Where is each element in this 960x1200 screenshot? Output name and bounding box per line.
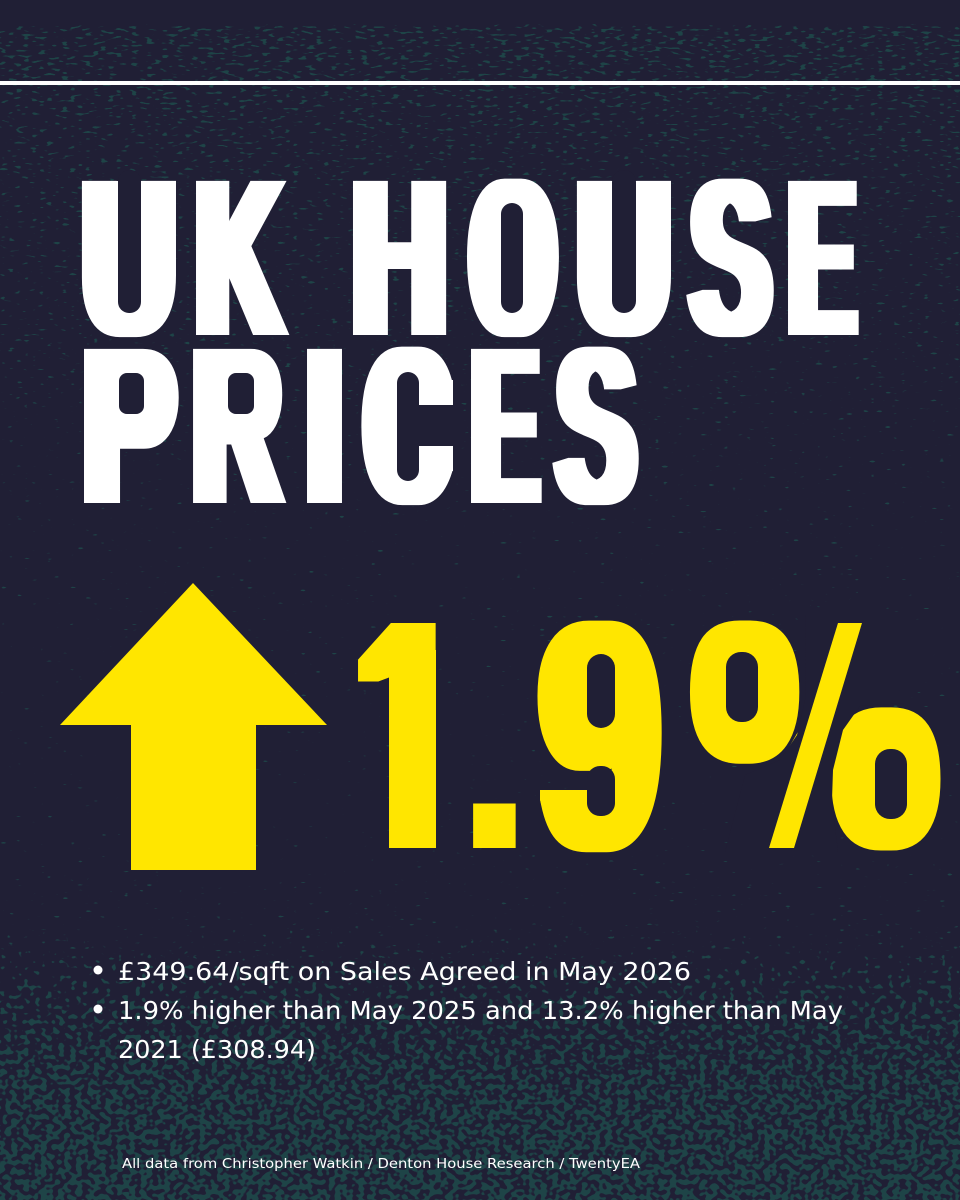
headline figure: 1.9%: . [472,577,517,912]
background texture: upper dashes [0,0,960,960]
title line 1: E [790,133,854,383]
icon: up arrow [60,583,327,870]
title line 1 [82,132,854,384]
title [82,132,854,551]
title line 2: S [557,300,635,551]
title line 2: P [83,300,175,551]
figure counter fill [389,640,918,848]
title line 1: O [470,133,556,383]
figure counters [587,652,907,819]
title line 2: I [306,301,343,551]
bullet 2: 2021 (£308.94) [118,1035,316,1064]
bullet 1: £349.64/sqft on Sales Agreed in May 2026 [118,957,691,986]
headline figure: 1.9%: 1 [355,552,461,918]
title line 2: E [472,301,537,551]
percent slash area [725,615,905,852]
source note: All data from Christopher Watkin / Denton House Research / TwentyEA [122,1157,640,1172]
bullet 2: 1.9% higher than May 2025 and 13.2% higher than May [118,996,843,1025]
title line 2: C [364,301,450,550]
percent slash [769,623,862,848]
title letter counters [118,170,636,481]
title line 1: U [82,132,176,383]
title letter counter fill [105,181,646,492]
headline figure: 1.9%: % [688,553,943,918]
title line 1: H [352,132,447,383]
bullet list [94,957,843,1064]
headline figure: 1.9% [358,620,940,852]
background texture: lower mesh [0,930,960,1200]
title line 1: K [196,133,283,384]
title line 2 [83,300,635,551]
headline figure: 1.9%: 9 [540,552,660,919]
title line 1: U [577,132,671,383]
top white rule [0,81,960,85]
bullet 2 [94,996,843,1064]
title line 2: R [193,302,281,551]
title line 1: S [691,134,770,384]
